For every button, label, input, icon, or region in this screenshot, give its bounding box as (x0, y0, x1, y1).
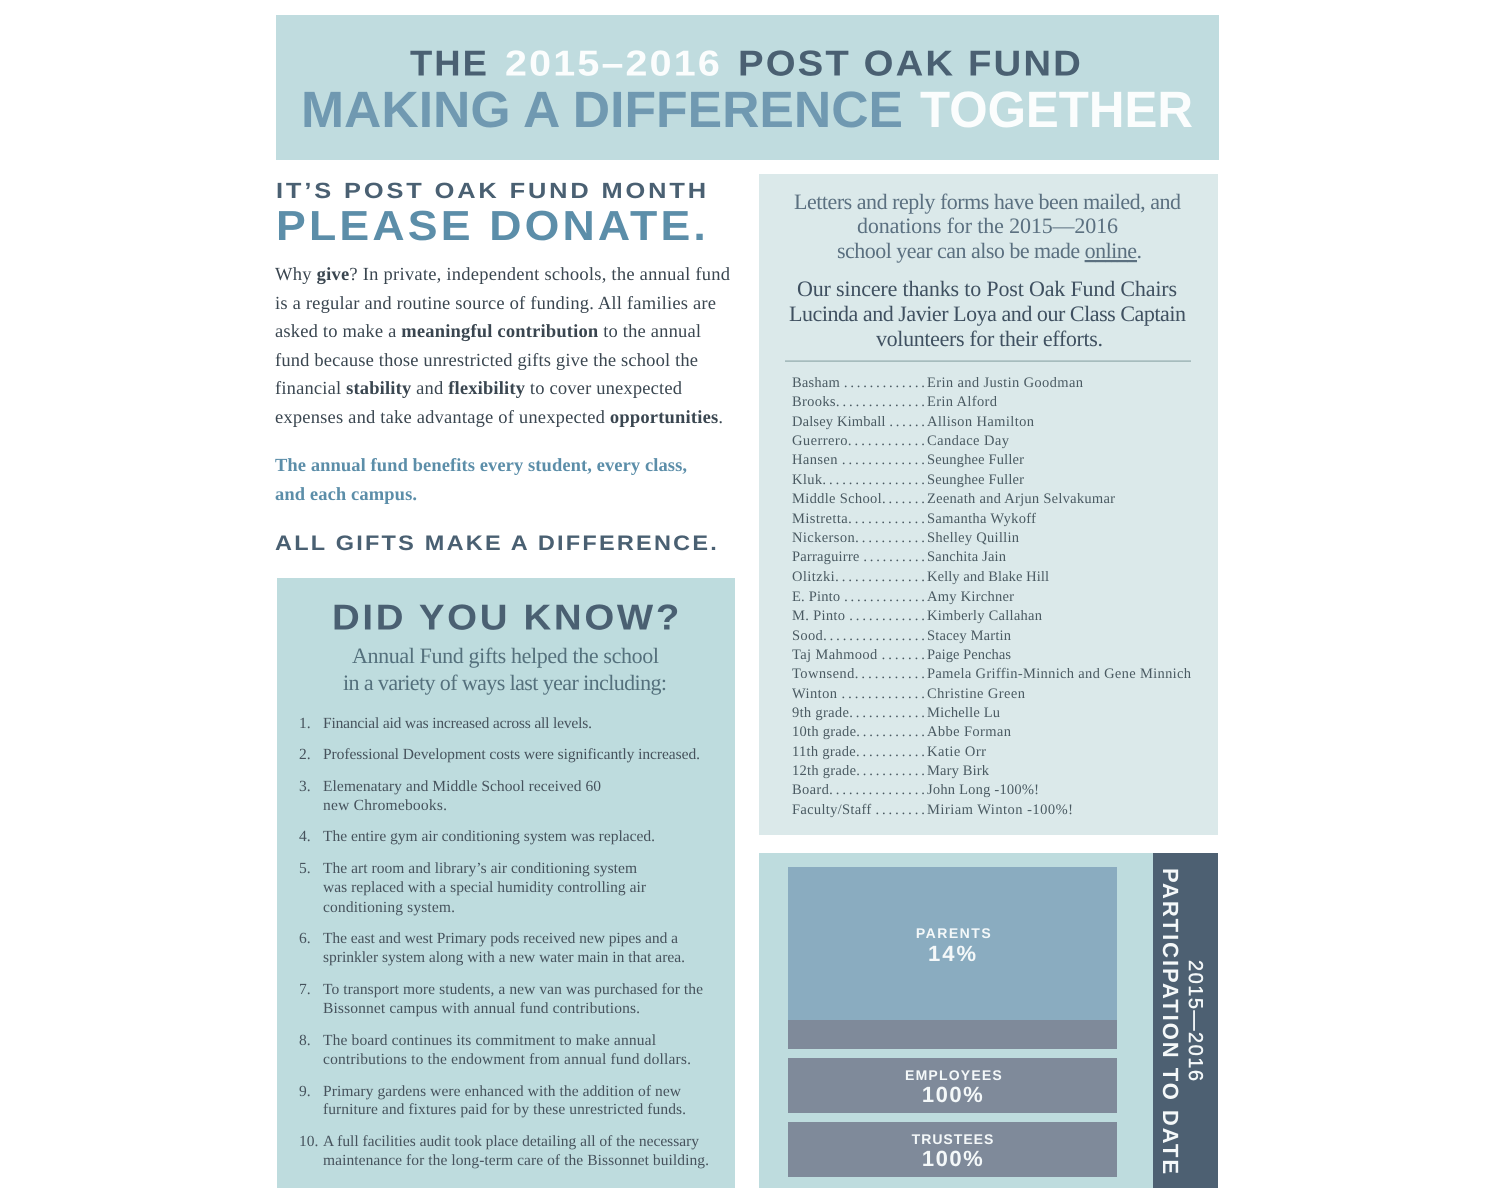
text block: intro: Annual Fund gifts helped the school (352, 643, 659, 668)
text block: why give (275, 265, 731, 428)
numbered list: fund uses: contributions to the endowment from annual fund dollars. (323, 1051, 691, 1068)
numbered list: fund uses: 9. (299, 1083, 311, 1100)
list: class captains: Michelle Lu (927, 705, 1000, 721)
heading: making a difference together: MAKING A DIFFERENCE (301, 81, 903, 138)
list: class captains: Townsend........... (792, 666, 928, 682)
numbered list: fund uses: conditioning system. (323, 899, 455, 916)
list: class captains: John Long -100%! (927, 782, 1039, 798)
numbered list: fund uses: 6. (299, 930, 311, 947)
numbered list: fund uses: 4. (299, 828, 311, 845)
numbered list: fund uses: The east and west Primary pods received new pipes and a (323, 930, 678, 947)
heading: making a difference together: TOGETHER (920, 81, 1193, 138)
numbered list: fund uses: Financial aid was increased across all levels. (323, 715, 592, 732)
list: class captains: Brooks.............. (792, 394, 928, 410)
list: class captains: Paige Penchas (927, 647, 1011, 663)
list: class captains: Nickerson........... (792, 530, 928, 546)
heading: making a difference together (301, 81, 1193, 138)
list: class captains: Sood................ (792, 628, 928, 644)
text block: thanks to chairs: volunteers for their efforts. (876, 326, 1103, 351)
heading: did you know: DID YOU KNOW? (332, 596, 682, 638)
list: class captains: Stacey Martin (927, 628, 1012, 644)
list: class captains: Candace Day (927, 433, 1010, 449)
numbered list: fund uses: Professional Development costs were significantly increased. (323, 746, 700, 763)
list: class captains: Seunghee Fuller (927, 452, 1024, 468)
list: class captains: E. Pinto ............. (792, 589, 928, 605)
heading: fund title (410, 42, 1083, 84)
text block: why give: Why give? In private, independent schools, the annual fund (275, 265, 731, 285)
bar: employees: 100% (922, 1082, 984, 1107)
sidebar: participation to date: 2015—2016 (1184, 960, 1206, 1081)
list: class captains: Erin and Justin Goodman (927, 375, 1084, 391)
list: class captains: Zeenath and Arjun Selvakumar (927, 491, 1115, 507)
list: class captains: Miriam Winton -100%! (927, 802, 1073, 818)
text block: why give: is a regular and routine source of funding. All families are (275, 294, 716, 314)
list: class captains: Winton ............. (792, 686, 928, 702)
numbered list: fund uses: was replaced with a special humidity controlling air (323, 879, 647, 896)
list: class captains: Middle School....... (792, 491, 928, 507)
list: class captains: Mistretta............ (792, 511, 928, 527)
text block: intro: in a variety of ways last year including: (343, 670, 667, 695)
text block: donation info (794, 189, 1181, 263)
list: class captains: Board............... (792, 782, 928, 798)
numbered list: fund uses: new Chromebooks. (323, 797, 447, 814)
list: class captains: Hansen ............. (792, 452, 928, 468)
bar: employees (788, 1058, 1117, 1113)
list: class captains (792, 375, 1192, 818)
list: class captains: Seunghee Fuller (927, 472, 1024, 488)
list: class captains: Mary Birk (927, 763, 990, 779)
list: class captains: Basham ............. (792, 375, 928, 391)
list: class captains: Sanchita Jain (927, 549, 1007, 565)
list: class captains: Parraguirre .......... (792, 549, 928, 565)
list: class captains: 10th grade........... (792, 724, 928, 740)
numbered list: fund uses: 3. (299, 778, 311, 795)
panel: thanks and class captains (759, 174, 1218, 835)
heading: fund title: POST OAK FUND (738, 42, 1083, 84)
text block: donation info: school year can also be made online. (837, 238, 1142, 263)
numbered list: fund uses: maintenance for the long-term care of the Bissonnet building. (323, 1152, 709, 1169)
list: class captains: Shelley Quillin (927, 530, 1020, 546)
list: class captains: Erin Alford (927, 394, 998, 410)
bar: parents (788, 867, 1117, 1049)
text block: intro (343, 643, 667, 695)
sidebar: participation to date: PARTICIPATION TO DATE (1158, 868, 1183, 1174)
numbered list: fund uses: The art room and library’s air conditioning system (323, 860, 637, 877)
numbered list: fund uses: 1. (299, 715, 311, 732)
list: class captains: 11th grade........... (792, 744, 928, 760)
list: class captains: Samantha Wykoff (927, 511, 1036, 527)
panel: please donate appeal (275, 178, 731, 555)
list: class captains: Guerrero............ (792, 433, 928, 449)
bar: trustees (788, 1122, 1117, 1177)
numbered list: fund uses: 7. (299, 981, 311, 998)
sidebar: participation to date (1153, 853, 1218, 1188)
list: class captains: 9th grade............ (792, 705, 928, 721)
numbered list: fund uses: 2. (299, 746, 311, 763)
list: class captains: Dalsey Kimball ...... (792, 414, 928, 430)
text block: why give: asked to make a meaningful contribution to the annual (275, 322, 701, 342)
heading: fund title: THE (410, 42, 489, 84)
text block: thanks to chairs: Lucinda and Javier Loya and our Class Captain (789, 301, 1186, 326)
list: class captains: M. Pinto ............ (792, 608, 928, 624)
list: class captains: Olitzki.............. (792, 569, 928, 585)
list: class captains: Kluk................ (792, 472, 928, 488)
heading: please donate: PLEASE DONATE. (276, 202, 709, 249)
text block: benefits statement: The annual fund benefits every student, every class, (275, 456, 687, 476)
list: class captains: Katie Orr (927, 744, 986, 760)
text block: benefits statement: and each campus. (275, 485, 417, 505)
bar: trustees: 100% (922, 1146, 984, 1171)
numbered list: fund uses: 8. (299, 1032, 311, 1049)
list: class captains: Allison Hamilton (927, 414, 1035, 430)
numbered list: fund uses: sprinkler system along with a new water main in that area. (323, 949, 685, 966)
bar: trustees: TRUSTEES (912, 1131, 994, 1147)
text block: donation info: Letters and reply forms have been mailed, and (794, 189, 1181, 214)
list: class captains: Taj Mahmood ....... (792, 647, 928, 663)
bar: parents: 14% (928, 941, 978, 966)
bar: employees: EMPLOYEES (905, 1067, 1003, 1083)
text block: why give: financial stability and flexibility to cover unexpected (275, 379, 683, 399)
numbered list: fund uses (299, 715, 709, 1169)
numbered list: fund uses: Bissonnet campus with annual fund contributions. (323, 1000, 640, 1017)
numbered list: fund uses: furniture and fixtures paid for by these unrestricted funds. (323, 1101, 686, 1118)
numbered list: fund uses: The board continues its commitment to make annual (323, 1032, 656, 1049)
numbered list: fund uses: Primary gardens were enhanced with the addition of new (323, 1083, 682, 1100)
panel: header banner (276, 15, 1219, 160)
numbered list: fund uses: The entire gym air conditioning system was replaced. (323, 828, 655, 845)
text block: donation info: donations for the 2015—2016 (857, 213, 1118, 238)
numbered list: fund uses: Elemenatary and Middle School received 60 (323, 778, 601, 795)
text block: thanks to chairs (789, 276, 1186, 351)
list: class captains: Pamela Griffin-Minnich and Gene Minnich (927, 666, 1192, 682)
numbered list: fund uses: 10. (299, 1133, 318, 1150)
list: class captains: 12th grade........... (792, 763, 928, 779)
list: class captains: Kimberly Callahan (927, 608, 1043, 624)
numbered list: fund uses: A full facilities audit took place detailing all of the necessary (323, 1133, 699, 1150)
heading: post oak fund month: IT’S POST OAK FUND MONTH (276, 178, 709, 203)
text block: benefits statement (275, 456, 687, 505)
panel: did you know (277, 578, 735, 1188)
panel: participation chart (759, 853, 1218, 1188)
text block: thanks to chairs: Our sincere thanks to Post Oak Fund Chairs (797, 276, 1177, 301)
heading: all gifts make a difference: ALL GIFTS MAKE A DIFFERENCE. (275, 532, 719, 555)
text block: why give: expenses and take advantage of unexpected opportunities. (275, 408, 723, 428)
numbered list: fund uses: To transport more students, a new van was purchased for the (323, 981, 703, 998)
list: class captains: Amy Kirchner (927, 589, 1014, 605)
list: class captains: Abbe Forman (927, 724, 1012, 740)
bar: parents: PARENTS (916, 925, 992, 941)
list: class captains: Christine Green (927, 686, 1026, 702)
list: class captains: Kelly and Blake Hill (927, 569, 1049, 585)
numbered list: fund uses: 5. (299, 860, 311, 877)
list: class captains: Faculty/Staff ........ (792, 802, 928, 818)
text block: why give: fund because those unrestricted gifts give the school the (275, 351, 698, 371)
heading: fund title: 2015–2016 (505, 42, 722, 84)
